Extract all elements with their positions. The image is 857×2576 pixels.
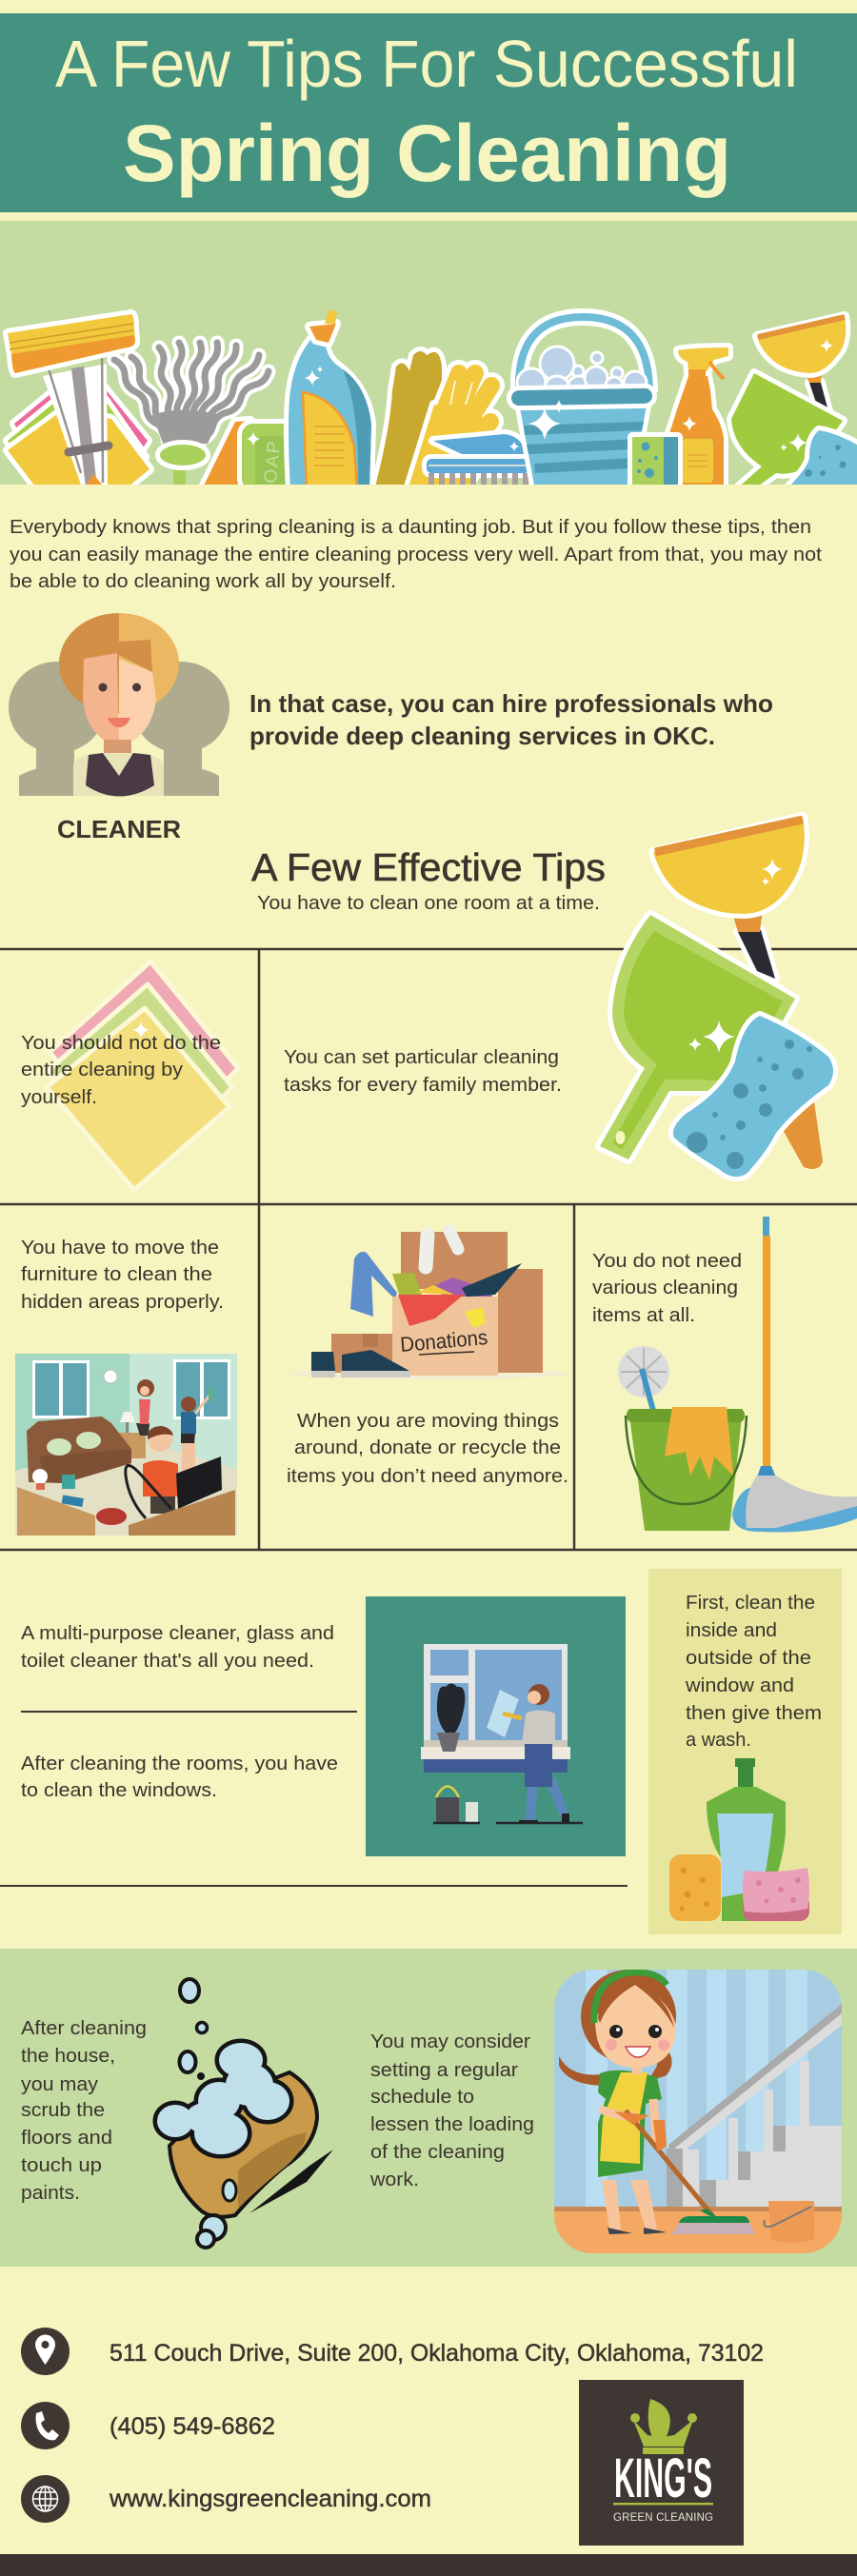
icon: dish soap bottle — [707, 1758, 786, 1921]
panel: window wash tip — [648, 1569, 842, 1934]
panel: cleaning tools band — [0, 221, 857, 493]
divider lines — [0, 1712, 628, 1886]
tip: scrub floors: touch up — [21, 2154, 102, 2176]
tip: donate or recycle: around, donate or recycle the — [294, 1437, 561, 1458]
tip: not by yourself — [21, 1032, 221, 1108]
tip: clean the windows: to clean the windows. — [21, 1779, 217, 1801]
sneakers — [311, 1350, 410, 1377]
right silhouette — [132, 662, 229, 796]
sponge handle — [782, 1101, 823, 1169]
icon: spray bottle — [669, 347, 728, 490]
tip text: window and — [685, 1674, 794, 1696]
tip: regular schedule: lessen the loading — [370, 2113, 534, 2135]
contact: website — [21, 2475, 431, 2523]
illustration: donation boxes — [289, 1231, 568, 1379]
tip: not by yourself: You should not do the — [21, 1032, 221, 1054]
green bucket — [626, 1407, 747, 1531]
icon: globe — [21, 2475, 70, 2523]
contact: address — [21, 2328, 764, 2375]
icon: blue detergent bottle — [289, 309, 371, 490]
intro text block — [10, 516, 822, 592]
callout: hire professionals — [249, 689, 773, 750]
icon: green sponge — [632, 437, 678, 489]
tip: donate or recycle: items you don’t need anymore. — [287, 1465, 568, 1487]
toilet brush — [618, 1346, 669, 1411]
icon: location pin — [21, 2328, 70, 2375]
windows — [32, 1359, 230, 1419]
tip: fewer cleaning items — [592, 1250, 742, 1326]
sofa — [27, 1417, 131, 1483]
tip: scrub floors: you may — [21, 2073, 99, 2095]
plant — [437, 1683, 465, 1752]
icon: dustpan — [731, 373, 843, 490]
icon: phone — [21, 2402, 70, 2449]
wordmark: KING'S — [614, 2447, 712, 2509]
tip: fewer cleaning items: items at all. — [592, 1304, 695, 1326]
intro text block: be able to do cleaning work all by yourself. — [10, 570, 396, 592]
icon: crown and leaf — [630, 2399, 697, 2454]
contact: phone — [21, 2402, 275, 2449]
tip: family tasks — [284, 1046, 562, 1096]
tip text: then give them — [686, 1702, 822, 1724]
illustration: woman sweeping — [554, 1970, 842, 2253]
icon: blue sponge — [786, 430, 857, 490]
tip: not by yourself: yourself. — [21, 1086, 97, 1108]
title banner — [0, 13, 857, 212]
intro text block: Everybody knows that spring cleaning is a daunting job. But if you follow these tips, then — [10, 516, 811, 538]
tip: fewer cleaning items: various cleaning — [592, 1277, 738, 1298]
icon: soap bars — [203, 421, 293, 493]
tip: regular schedule — [369, 2031, 534, 2190]
illustration: woman washing window — [366, 1596, 626, 1856]
title line 1: A Few Tips For Successful — [55, 27, 798, 101]
tip: scrub floors: scrub the — [21, 2099, 105, 2121]
tip: fewer cleaning items: You do not need — [592, 1250, 742, 1272]
tip: donate or recycle — [287, 1410, 568, 1487]
tip: regular schedule: of the cleaning — [370, 2141, 505, 2163]
socks — [426, 1231, 458, 1267]
icon: squeegee mop — [8, 314, 135, 490]
tools illustration — [8, 309, 857, 493]
tip: donate or recycle: When you are moving things — [297, 1410, 559, 1432]
tip: multi-purpose cleaner: A multi-purpose cleaner, glass and — [21, 1622, 334, 1644]
icon: cloths — [8, 373, 149, 490]
tip: regular schedule: setting a regular — [370, 2059, 518, 2081]
contact: website: www.kingsgreencleaning.com — [109, 2486, 431, 2512]
tip: move the furniture: hidden areas properly. — [21, 1291, 224, 1313]
panel: final tips band — [0, 1949, 857, 2267]
cleaner label: CLEANER — [57, 815, 181, 843]
grid lines — [0, 949, 857, 1550]
tagline: GREEN CLEANING — [613, 2512, 713, 2524]
tip: scrub floors: the house, — [21, 2045, 115, 2067]
staircase — [667, 2004, 842, 2207]
icon: soapy sponge — [157, 1979, 333, 2248]
plunger — [653, 817, 805, 979]
girl — [559, 1970, 712, 2234]
icon: stacked cloths — [47, 961, 238, 1190]
blue sponge — [673, 1016, 833, 1177]
tip text: outside of the — [686, 1647, 811, 1669]
tip: family tasks: You can set particular cleaning — [284, 1046, 559, 1068]
tip: move the furniture: You have to move the — [21, 1237, 219, 1258]
woman — [503, 1684, 569, 1824]
icon: pink sponge — [743, 1868, 809, 1921]
icon: soap bars: OAP — [261, 441, 285, 484]
heading: a few effective tips: A Few Effective Tips — [251, 845, 606, 889]
boy vacuuming — [96, 1426, 178, 1525]
bucket — [764, 2201, 814, 2243]
mop — [732, 1217, 857, 1532]
icon: bucket brush and mop — [618, 1217, 857, 1532]
tip: scrub floors: After cleaning — [21, 2017, 147, 2039]
icon: bucket with bubbles — [511, 317, 652, 490]
tip text: a wash. — [686, 1729, 751, 1751]
intro text block: you can easily manage the entire cleaning process very well. Apart from that, you may not — [10, 544, 822, 565]
icon: rubber gloves — [374, 351, 491, 490]
donations label: Donations — [399, 1325, 488, 1357]
icon: scrub brush — [427, 434, 529, 486]
tip text: inside and — [686, 1619, 777, 1641]
tip: clean the windows: After cleaning the rooms, you have — [21, 1753, 338, 1774]
tip text — [685, 1592, 822, 1751]
clothes — [350, 1252, 522, 1317]
tip: family tasks: tasks for every family member. — [284, 1074, 562, 1096]
callout: hire professionals: In that case, you can hire professionals who — [249, 689, 773, 718]
tip: clean the windows — [21, 1753, 338, 1801]
tip: scrub floors — [21, 2017, 147, 2204]
window — [421, 1644, 570, 1773]
illustration: family cleaning room — [15, 1354, 237, 1536]
tip: scrub floors: floors and — [21, 2127, 112, 2149]
child at window — [181, 1387, 213, 1474]
bucket and spray — [433, 1786, 583, 1823]
icon: plunger dustpan sponge — [600, 817, 833, 1177]
tip: regular schedule: schedule to — [370, 2086, 474, 2108]
icon: cleaner figure — [9, 613, 229, 796]
tip: multi-purpose cleaner: toilet cleaner that's all you need. — [21, 1650, 314, 1672]
tip: scrub floors: paints. — [21, 2182, 80, 2204]
mother — [136, 1379, 154, 1436]
tip: not by yourself: entire cleaning by — [21, 1059, 184, 1080]
contact: phone: (405) 549-6862 — [110, 2413, 275, 2440]
tip: multi-purpose cleaner — [21, 1622, 334, 1672]
icon: plunger — [757, 316, 846, 411]
icon: orange sponge — [669, 1854, 721, 1921]
tip: one room at a time: You have to clean one room at a time. — [257, 892, 600, 914]
callout: hire professionals: provide deep cleaning services in OKC. — [249, 722, 715, 750]
tip: move the furniture — [21, 1237, 224, 1313]
dustpan — [600, 915, 795, 1159]
left silhouette — [9, 662, 106, 796]
logo: King's Green Cleaning — [579, 2380, 744, 2546]
tip: regular schedule: work. — [369, 2169, 419, 2190]
tip: move the furniture: furniture to clean the — [21, 1263, 212, 1285]
title line 2: Spring Cleaning — [123, 109, 731, 198]
tip text: First, clean the — [686, 1592, 815, 1614]
tip: regular schedule: You may consider — [370, 2031, 530, 2052]
footer bar — [0, 2554, 857, 2576]
contact: address: 511 Couch Drive, Suite 200, Oklahoma City, Oklahoma, 73102 — [110, 2340, 764, 2367]
icon: string mop — [114, 343, 269, 485]
broom — [671, 2209, 755, 2234]
